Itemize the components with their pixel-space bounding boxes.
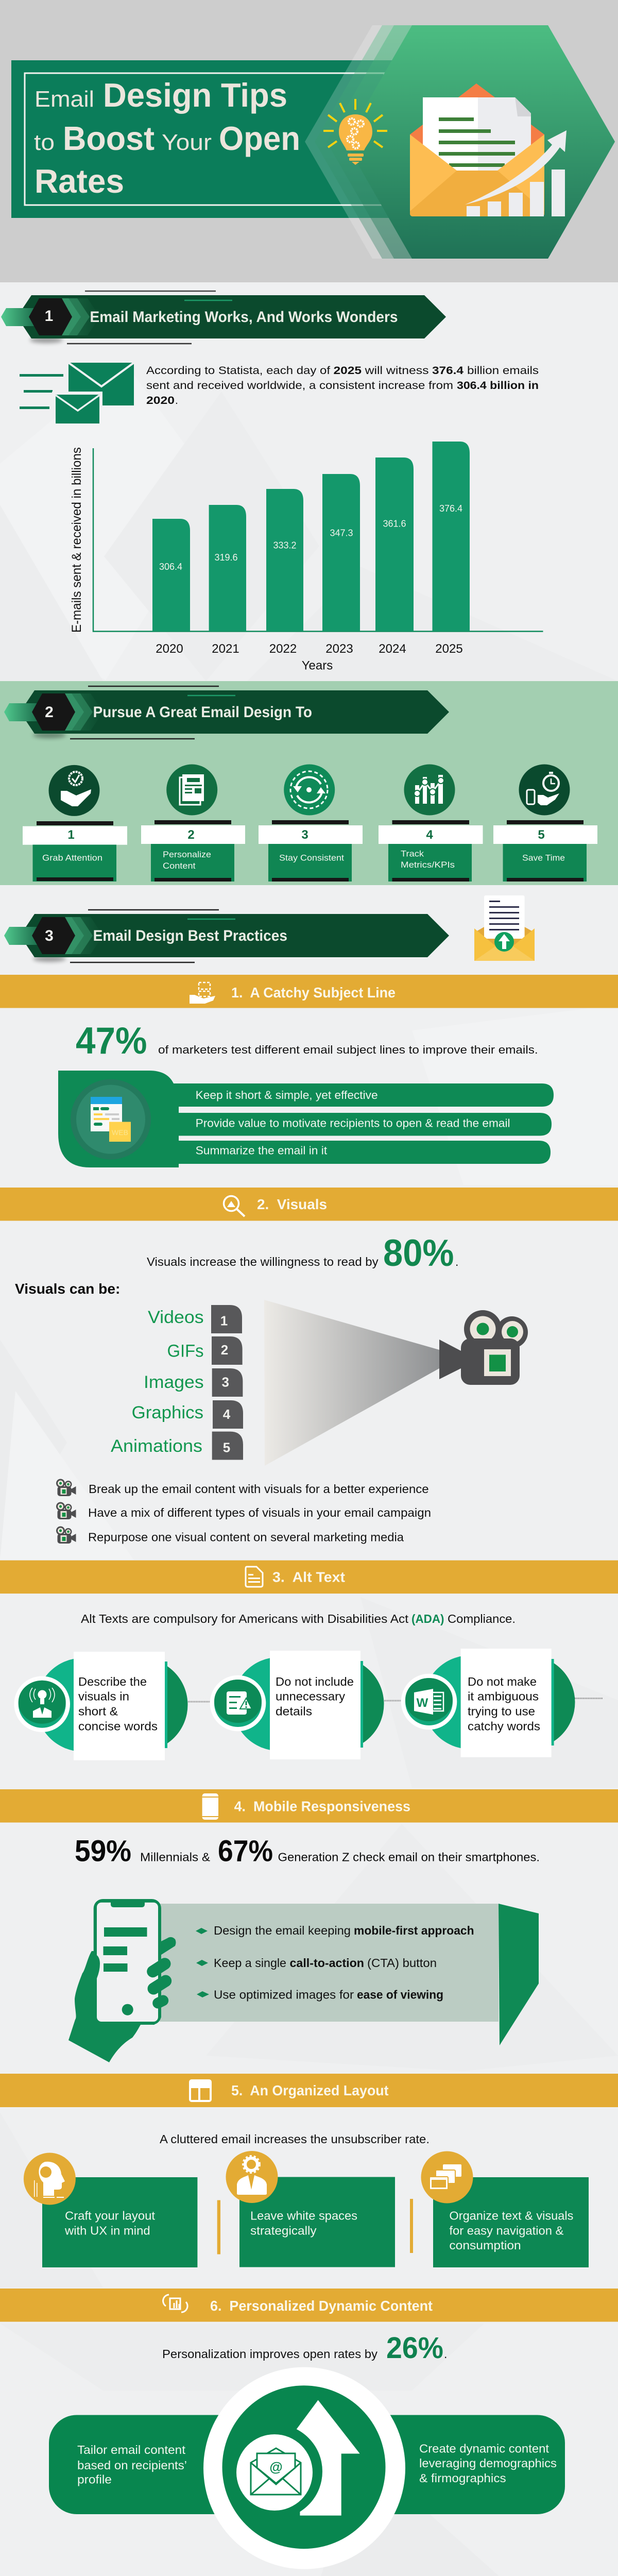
section header 2: Pursue A Great Email Design To [93,704,312,721]
card 3: stay consistent [259,765,363,882]
section header 2 [4,686,449,739]
card: leave white spaces: strategically [250,2224,317,2237]
statistic paragraph: According to Statista, each day of [146,365,330,377]
bar values [159,503,462,572]
card: organize text and visuals: Organize text & visuals [449,2209,573,2223]
title: Design Tips [103,76,287,114]
bullet list: visuals tips: Have a mix of different types of visuals in your email campaign [88,1506,431,1519]
card: leave white spaces [226,2151,395,2267]
card 4: track metrics: 4 [426,828,433,842]
card: do not make it ambiguous: catchy words [468,1720,540,1733]
bar values: 347.3 [330,528,353,538]
stat: 47 percent: of marketers test different email subject lines to improve their emails. [158,1043,538,1056]
year labels: 2022 [269,642,297,656]
tip list: mobile-first approach [354,1924,474,1937]
card 1: grab attention [23,765,127,882]
year labels: 2020 [156,642,183,656]
y axis label: E-mails sent & received in billions [70,447,84,633]
list: visual types: GIFs [167,1342,204,1361]
year labels: 2025 [435,642,463,656]
icon: envelopes [20,363,134,423]
heading: 4. Mobile Responsiveness [234,1799,410,1815]
list: visual types: Graphics [132,1403,203,1422]
card: describe the visuals: short & [78,1704,118,1718]
title: Email [35,87,94,112]
title: Your [162,130,212,155]
stat: millennials and generation z: 59% [75,1834,131,1868]
card: do not make it ambiguous: it ambiguous [468,1689,539,1703]
bar values: 319.6 [214,552,238,563]
text: dynamic content: Create dynamic content [419,2442,550,2455]
alt text intro: Alt Texts are compulsory for Americans with Disabilities Act [81,1612,409,1625]
card: leave white spaces: Leave white spaces [250,2209,357,2223]
alt text intro: (ADA) [411,1612,444,1625]
heading: 3. Alt Text [272,1569,345,1585]
card 5: save time: 5 [538,828,545,842]
icon: document [246,1567,263,1587]
card: do not include details: Do not include [276,1675,354,1688]
heading: 6. Personalized Dynamic Content [210,2298,433,2314]
text: dynamic content [419,2442,557,2485]
stat: 80 percent: Visuals increase the willingness to read by [147,1255,379,1268]
stat: 26 percent: 26% [386,2331,443,2365]
list: visual types: 1 [220,1313,228,1329]
stat: 47 percent: 47% [76,1020,147,1062]
text: dynamic content: & firmographics [419,2471,506,2485]
tip list: ease of viewing [357,1988,443,2001]
bar values: 376.4 [439,503,462,514]
icon: linked charts [163,2295,187,2312]
title: to [34,130,55,155]
card: organize text and visuals [421,2151,589,2267]
tip texts [196,1089,510,1157]
card: do not include details: details [276,1704,312,1718]
statistic paragraph: 2020 [146,395,175,406]
icon: video camera [439,1310,528,1385]
card 2: personalize content: Content [163,861,196,871]
card: do not include details: unnecessary [276,1689,346,1703]
text: dynamic content: leveraging demographics [419,2456,557,2470]
section header 3: 3 [45,927,54,944]
icon: phone [202,1793,218,1820]
layout intro: A cluttered email increases the unsubscriber rate. [160,2132,430,2146]
stat: millennials and generation z: 67% [218,1834,273,1868]
text: tailor content: Tailor email content [77,2443,186,2456]
panel: personalization [49,2367,565,2569]
tip texts: Keep it short & simple, yet effective [196,1089,378,1101]
card 2: personalize content: 2 [187,828,195,842]
bullet list: visuals tips [56,1479,431,1544]
title panel [11,60,392,218]
tip list: Use optimized images for [214,1988,354,2001]
tip list: Keep a single [214,1956,286,1970]
title: Open [219,120,300,157]
card 5: save time [493,765,597,882]
icon: upward arrow with email [228,2400,360,2519]
tip list: Design the email keeping [214,1924,351,1937]
bullet list: visuals tips: Break up the email content with visuals for a better experience [89,1482,429,1496]
card 2: personalize content: Personalize [163,850,211,859]
list: visual types: Animations [111,1436,202,1456]
tip texts: Provide value to motivate recipients to open & read the email [196,1117,510,1129]
heading: Email Marketing Works, And Works Wonders [90,309,398,326]
axes [93,448,543,632]
card: describe the visuals: visuals in [78,1689,129,1703]
icon: web page: WEB [112,1128,128,1137]
card 1: grab attention: Grab Attention [42,853,102,862]
stat: 26 percent: . [444,2347,447,2361]
text: tailor content: based on recipients’ [77,2459,187,2472]
icon: word document: W [417,1696,428,1710]
year labels: 2023 [325,642,353,656]
icon: person with idea [30,1688,55,1718]
icon: projector light cone [264,1300,439,1466]
list: visual types [111,1305,243,1460]
bars [152,442,470,631]
icon: layout [189,2079,212,2102]
bar values: 333.2 [273,540,297,550]
tip list: (CTA) button [367,1956,437,1970]
stat: millennials and generation z [75,1834,540,1868]
icon: open envelope with document and growth chart [410,83,566,216]
icon: head with gear [34,2162,65,2198]
stat: millennials and generation z: Generation Z check email on their smartphones. [278,1851,540,1864]
band 1: a catchy subject line [0,975,618,1008]
band 2: visuals [0,1188,618,1221]
subheading: visuals can be: Visuals can be: [15,1281,120,1297]
card: describe the visuals: Describe the [78,1675,147,1688]
icon: mini camera [56,1479,76,1496]
hero banner [0,0,618,282]
section header 1 [1,291,446,344]
card 4: track metrics [379,765,483,882]
list: visual types: 5 [223,1440,230,1455]
bar chart: e-mails sent and received [70,442,543,673]
statistic paragraph: billion emails [467,365,539,377]
dotted connectors [188,1698,603,1702]
card: craft your layout [24,2153,197,2267]
card 3: stay consistent: 3 [301,828,308,842]
tip texts: Summarize the email in it [196,1144,327,1157]
statistic paragraph: 306.4 billion in [457,380,539,392]
band 5: an organized layout [0,2074,618,2107]
icon: magnifier [224,1196,245,1216]
card: describe the visuals [14,1652,188,1760]
heading: 2. Visuals [257,1196,327,1212]
year labels: 2021 [212,642,239,656]
band 3: alt text [0,1561,618,1594]
stat: 26 percent [162,2331,447,2365]
panel: pursue a great email design [0,681,618,885]
card: organize text and visuals: consumption [449,2239,521,2252]
statistic paragraph: will witness [364,365,429,377]
icon: envelope with letter and upload arrow [474,895,535,961]
tip list: call-to-action [289,1956,364,1970]
icon: web page [71,1079,151,1160]
card: do not include details [210,1651,384,1759]
list: visual types: Videos [148,1308,204,1327]
card 2: personalize content [141,765,245,882]
hexagon backdrop [305,25,615,259]
title: Rates [35,162,124,200]
list: visual types: 4 [223,1406,231,1422]
stat: 80 percent: 80% [383,1232,454,1274]
title [34,76,300,200]
card: do not make it ambiguous: trying to use [468,1704,535,1718]
list: visual types: 2 [221,1342,228,1358]
stat: 26 percent: Personalization improves open rates by [162,2347,378,2361]
icon: hand with subject line [190,982,215,1004]
title: Boost [63,120,154,157]
text: tailor content [77,2443,187,2486]
statistic paragraph: sent and received worldwide, a consistent increase from [146,380,453,392]
card: organize text and visuals: for easy navigation & [449,2224,563,2237]
band 6: personalized dynamic content [0,2289,618,2321]
card 3: stay consistent: Stay Consistent [279,853,344,862]
card: describe the visuals: concise words [78,1720,158,1733]
card 5: save time: Save Time [522,853,565,862]
icon: word document [414,1689,443,1715]
stat: 47 percent [76,1020,538,1062]
stat: 80 percent: . [455,1255,458,1268]
year labels [156,642,463,656]
stat: 80 percent [147,1232,458,1274]
icon: hand holding phone [68,1899,176,2062]
card 4: track metrics: Metrics/KPIs [401,860,455,870]
icon: mini camera [56,1526,76,1544]
section header 3: Email Design Best Practices [93,927,287,944]
icon: stacked windows [430,2164,461,2190]
bar values: 361.6 [383,518,406,529]
x axis label: Years [302,658,333,673]
statistic paragraph: 2025 [334,365,362,377]
icon: document with warning [227,1691,252,1715]
heading: 5. An Organized Layout [231,2082,389,2098]
band 4: mobile responsiveness [0,1789,618,1823]
heading: 1. A Catchy Subject Line [231,985,396,1001]
statistic paragraph: 376.4 [432,365,464,377]
card: do not make it ambiguous: Do not make [468,1675,537,1688]
card 1: grab attention: 1 [67,828,75,842]
stat: millennials and generation z: Millennials & [140,1851,210,1864]
icon: mini camera [56,1502,76,1519]
statistic paragraph [146,365,539,406]
section header 3 [4,910,449,962]
card: craft your layout: Craft your layout [65,2209,156,2223]
card: do not make it ambiguous [401,1649,575,1757]
card: craft your layout: with UX in mind [64,2224,150,2237]
panel: mobile tips [68,1899,539,2062]
bullet list: visuals tips: Repurpose one visual content on several marketing media [88,1530,404,1544]
icon: person with gear [237,2156,267,2195]
panel: subject line tips [58,1071,554,1167]
text: tailor content: profile [77,2473,112,2486]
tip list [196,1924,474,2001]
year labels: 2024 [379,642,406,656]
alt text intro: Compliance. [448,1612,516,1625]
statistic paragraph: . [175,395,178,406]
section header 2: 2 [45,704,54,721]
icon: upward arrow with email: @ [269,2459,283,2475]
bar values: 306.4 [159,562,182,572]
dividers [217,2199,413,2255]
icon: light bulb with gears [323,99,387,165]
number: 1 [45,308,53,325]
list: visual types: 3 [221,1375,229,1390]
list: visual types: Images [144,1372,204,1392]
card 4: track metrics: Track [401,849,424,858]
